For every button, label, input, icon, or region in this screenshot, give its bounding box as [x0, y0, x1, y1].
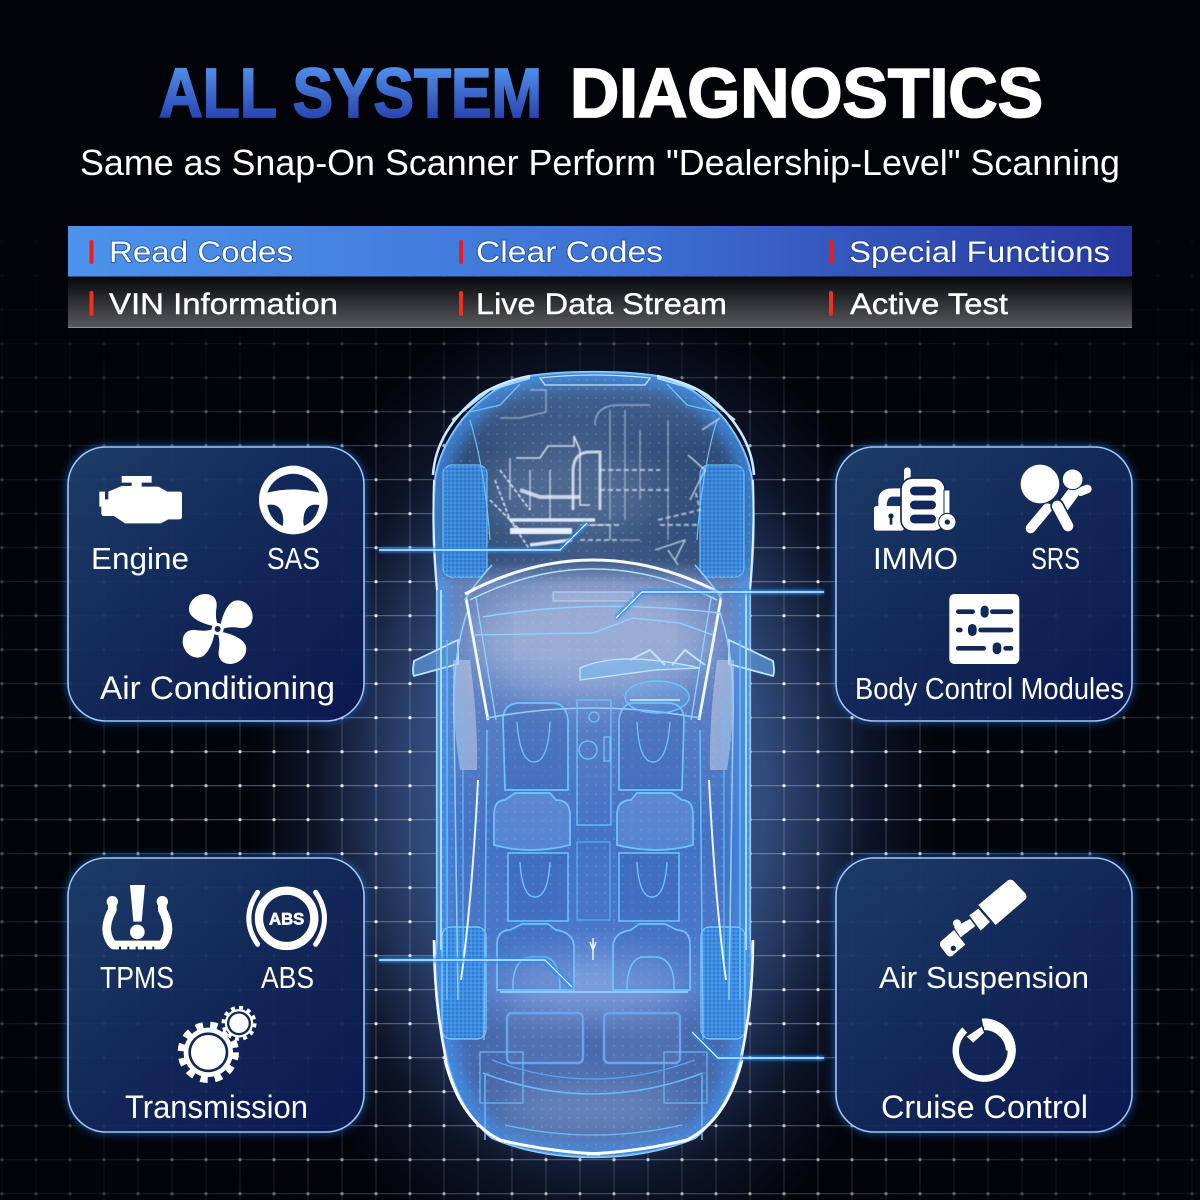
label: ABS: ABS: [261, 960, 314, 995]
icon: gears: [181, 1008, 255, 1080]
icon: ABS brake: [249, 891, 324, 946]
engine glow: [480, 440, 660, 540]
leader line: top-right: [616, 592, 824, 618]
label: Transmission: Transmission: [125, 1089, 308, 1125]
title: ALL SYSTEM: [159, 54, 542, 132]
windshield interior panel: [513, 600, 677, 660]
label: SRS: SRS: [1031, 541, 1080, 576]
icon: steering wheel: [259, 466, 328, 534]
icon: tire pressure: [107, 885, 168, 951]
label: Air Suspension: Air Suspension: [879, 960, 1089, 995]
label: IMMO: IMMO: [873, 541, 958, 576]
icon: fan: [183, 594, 253, 664]
feature band: blue row: Special Functions: [849, 236, 1110, 269]
label: Body Control Modules: Body Control Modules: [855, 671, 1124, 706]
feature band: dark row: Active Test: [850, 288, 1009, 321]
right half details: [587, 376, 774, 1154]
label: SAS: SAS: [267, 541, 320, 576]
feature band: dark row: VIN Information: [109, 288, 338, 321]
left half details: [413, 376, 600, 1154]
label: Engine: Engine: [91, 541, 189, 576]
label: Cruise Control: Cruise Control: [881, 1089, 1088, 1125]
leader line: bottom-left: [379, 960, 572, 987]
panel: body group: [836, 447, 1132, 721]
icon: sliders: [949, 594, 1019, 664]
feature band: blue row: Clear Codes: [476, 236, 663, 269]
car: [413, 372, 774, 1157]
icon: cruise dial: [953, 1018, 1016, 1082]
icon: ABS brake: ABS: [269, 909, 304, 928]
engine bay detail: [490, 390, 720, 565]
icon: airbag: [1021, 465, 1087, 528]
seam glow: [493, 955, 693, 1015]
cabin glow: [468, 580, 718, 700]
panel: comfort group: [836, 858, 1132, 1132]
subtitle: Same as Snap-On Scanner Perform "Dealership-Level" Scanning: [80, 142, 1120, 183]
feature band: blue row: Read Codes: [109, 236, 293, 269]
leader line: top-left: [379, 523, 587, 550]
body mesh: [433, 372, 754, 1157]
title: [159, 54, 1043, 132]
label: TPMS: TPMS: [100, 960, 174, 995]
car body: [433, 372, 754, 1157]
rear glow: [498, 1082, 688, 1138]
inner edge glow: [433, 372, 754, 1157]
panel: chassis group: [68, 858, 364, 1132]
cabin lines: [465, 375, 722, 1135]
feature band: blue row: [68, 226, 1132, 276]
icon: engine: [99, 476, 182, 523]
feature band: dark row: [68, 278, 1132, 328]
icon: immobilizer: [874, 467, 956, 531]
leader line: bottom-right: [692, 1032, 824, 1058]
feature band: dark row: Live Data Stream: [476, 288, 727, 321]
icon: shock absorber: [940, 880, 1026, 957]
title: DIAGNOSTICS: [570, 54, 1043, 132]
label: Air Conditioning: Air Conditioning: [100, 670, 335, 706]
panel: engine group: [68, 447, 364, 721]
